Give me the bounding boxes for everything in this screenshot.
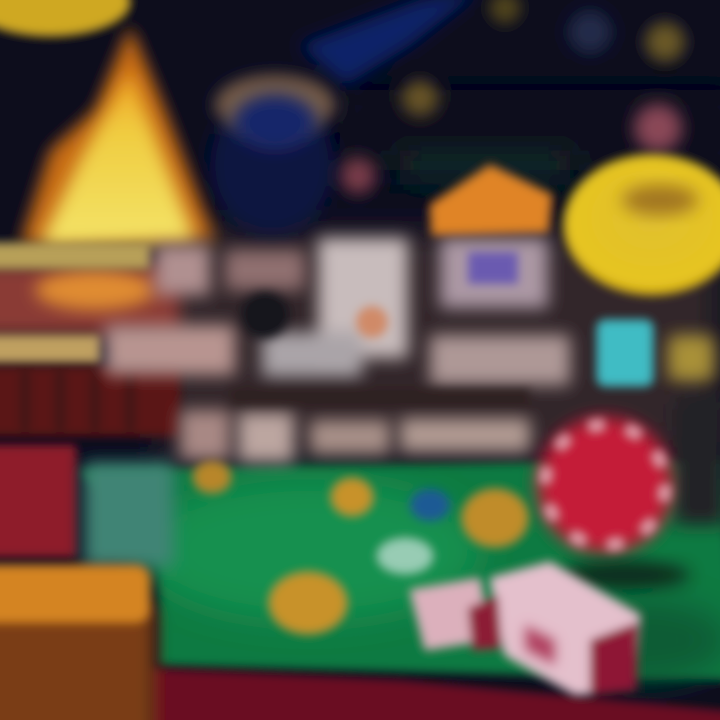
- teal box: [84, 462, 174, 567]
- dark machine right: [675, 395, 720, 525]
- white chip: [377, 538, 433, 574]
- distant lights: [340, 0, 685, 194]
- central white cards: [105, 238, 570, 462]
- dark red table edge: [150, 668, 720, 720]
- blue chip: [410, 489, 450, 521]
- red poker chip: [537, 417, 673, 553]
- orange slot machine: [430, 165, 552, 308]
- layered cake building: [0, 243, 180, 436]
- gold chips on table: [193, 461, 528, 634]
- blue streak: [300, 0, 480, 85]
- golden dome top left: [0, 0, 130, 36]
- shadow under chip: [560, 561, 690, 589]
- cyan screen: [597, 320, 653, 386]
- yellow screen: [668, 335, 714, 381]
- red box left: [0, 445, 76, 557]
- golden tower: [20, 25, 215, 245]
- big yellow sign: [564, 155, 720, 295]
- stacked white and red dice: [410, 562, 640, 695]
- green felt table: [80, 150, 720, 680]
- blue emblem: [210, 75, 335, 235]
- orange wooden crate: [0, 565, 155, 720]
